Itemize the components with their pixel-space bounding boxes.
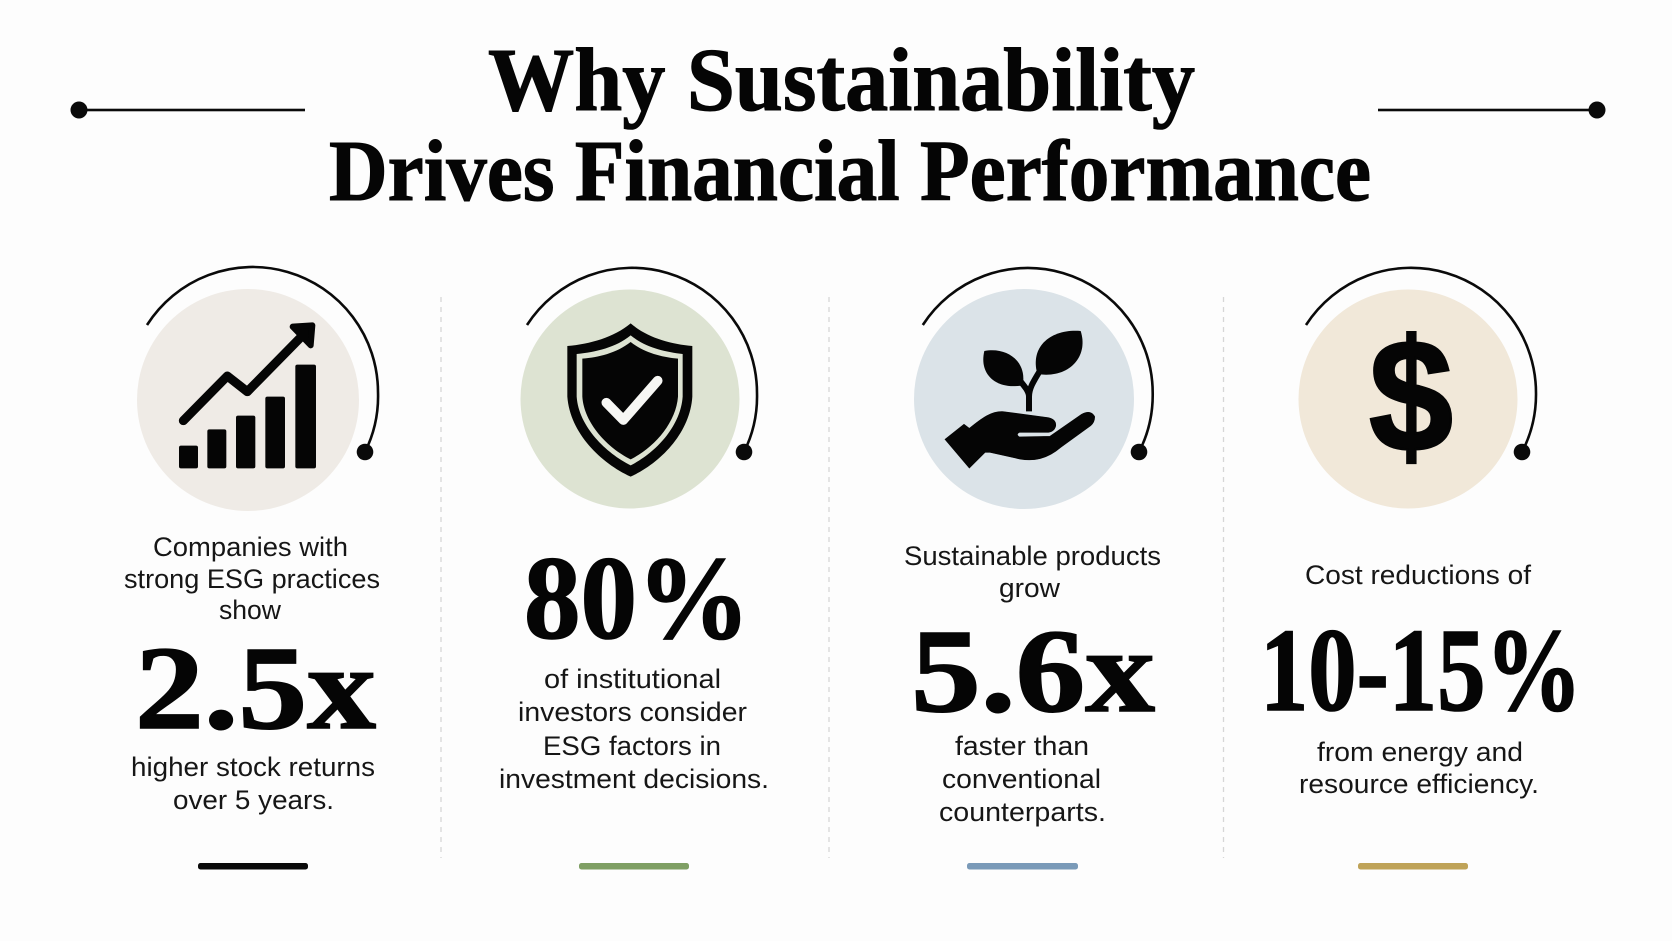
detail text <box>499 664 769 794</box>
icon: dollar sign in circle: $ <box>1369 306 1453 485</box>
intro text: strong ESG practices <box>124 564 380 594</box>
right title rule with dot <box>1378 102 1606 118</box>
left title rule with dot <box>70 102 305 118</box>
intro text <box>124 532 380 625</box>
icon: growth chart in circle <box>137 267 378 511</box>
big number: 2.5x <box>135 622 376 754</box>
intro text: Companies with <box>153 532 348 562</box>
intro text: show <box>219 595 282 625</box>
detail text: counterparts. <box>939 797 1106 827</box>
accent bar <box>579 863 689 870</box>
intro text: grow <box>999 573 1061 603</box>
big number: 80% <box>524 532 750 664</box>
detail text: ESG factors in <box>543 731 721 761</box>
title <box>329 31 1371 219</box>
title: Drives Financial Performance <box>329 122 1371 219</box>
accent bar <box>967 863 1078 870</box>
panel: cost reductions <box>1260 268 1582 870</box>
detail text: from energy and <box>1317 737 1523 767</box>
detail text: over 5 years. <box>173 785 334 815</box>
detail text <box>939 731 1106 827</box>
icon: shield with check in circle <box>520 268 757 508</box>
detail text <box>131 752 375 815</box>
accent bar <box>198 863 308 870</box>
big number: 10-15% <box>1260 604 1582 736</box>
big number: 5.6x <box>911 605 1155 737</box>
detail text: higher stock returns <box>131 752 375 782</box>
detail text: investors consider <box>518 697 747 727</box>
panel: sustainable products <box>904 268 1161 870</box>
detail text: conventional <box>942 764 1101 794</box>
detail text <box>1299 737 1539 799</box>
detail text: resource efficiency. <box>1299 769 1539 799</box>
detail text: investment decisions. <box>499 764 769 794</box>
icon: hand holding plant in circle <box>914 268 1153 509</box>
icon: dollar sign in circle <box>1298 268 1536 508</box>
detail text: faster than <box>955 731 1089 761</box>
detail text: of institutional <box>544 664 721 694</box>
panel: institutional investors <box>499 268 769 870</box>
panel: ESG stock returns <box>124 267 380 870</box>
intro text: Cost reductions of <box>1305 560 1532 590</box>
intro text <box>904 541 1161 603</box>
title: Why Sustainability <box>488 31 1195 130</box>
intro text: Sustainable products <box>904 541 1161 571</box>
accent bar <box>1358 863 1468 870</box>
